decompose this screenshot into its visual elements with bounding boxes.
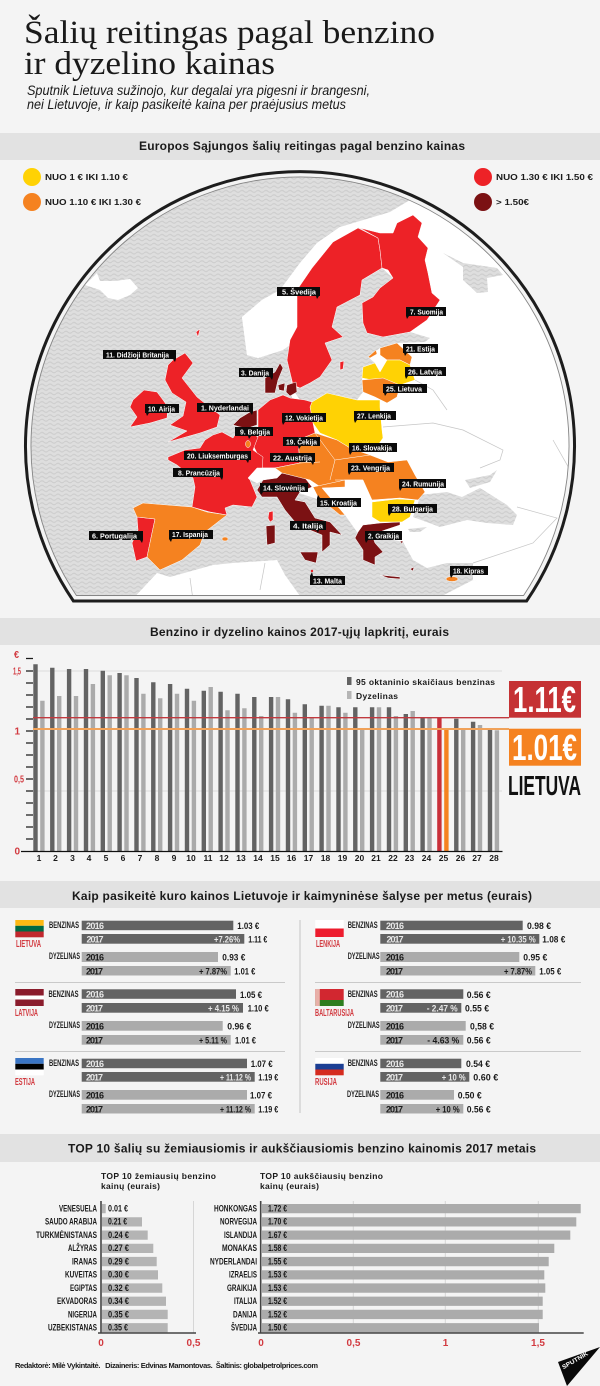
panel: Estonia: + 11.12 %	[220, 1104, 251, 1114]
heading: top 10 section	[0, 1134, 600, 1162]
country labels: 27. Lenkija	[357, 412, 392, 420]
x axis labels: 25	[439, 853, 448, 863]
panel: Latvia: 2017	[86, 1004, 103, 1014]
Italy and Slovenia	[257, 473, 342, 552]
chart: lowest prices: UZBEKISTANAS	[48, 1322, 97, 1332]
country labels: 25. Lietuva	[386, 384, 423, 394]
chart: lowest prices: KUVEITAS	[65, 1270, 97, 1280]
title	[24, 13, 435, 82]
country labels: 8. Prancūzija	[178, 468, 221, 478]
chart: highest prices: MONAKAS	[222, 1243, 257, 1253]
panel: Russia: 0.56 €	[467, 1104, 491, 1116]
panel: Belarus: - 4.63 %	[427, 1036, 459, 1046]
panel: Estonia: BENZINAS	[49, 1058, 79, 1068]
panel: Latvia: 1.10 €	[248, 1004, 269, 1014]
country labels: 4. Italija	[293, 522, 324, 530]
map ring	[31, 177, 569, 595]
chart: lowest prices: 0.35 €	[108, 1310, 129, 1320]
Germany	[253, 395, 315, 468]
country labels: 20. Liuksemburgas	[187, 452, 248, 460]
chart: lowest prices: EKVADORAS	[57, 1296, 97, 1306]
panel: Lithuania: LIETUVA	[16, 939, 41, 950]
x axis labels: 20	[355, 853, 364, 863]
panel: Russia: + 10 %	[436, 1104, 460, 1114]
country labels: 2. Graikija	[368, 532, 400, 540]
x axis labels: 24	[422, 853, 431, 863]
chart: lowest prices: 0.34 €	[108, 1296, 129, 1306]
chart: lowest prices: TOP 10 žemiausių benzino	[101, 1171, 216, 1181]
legend: price ranges: NUO 1.30 € IKI 1.50 €	[496, 172, 593, 182]
Latvia	[362, 360, 415, 385]
Netherlands	[233, 410, 257, 428]
chart: highest prices: 1	[443, 1338, 449, 1349]
panel: Belarus: 0.55 €	[465, 1004, 490, 1014]
Poland	[310, 393, 383, 448]
country labels: 11. Didžioji Britanija	[106, 350, 170, 360]
country labels: 1. Nyderlandai	[201, 404, 249, 412]
panel: Poland: + 7.87%	[504, 966, 532, 976]
heading: yearly change section: Kaip pasikeitė kuro kainos Lietuvoje ir kaimyninėse šalyse per metus (eurais)	[72, 889, 532, 903]
x axis labels: 26	[456, 853, 465, 863]
legend: price ranges: NUO 1.10 € IKI 1.30 €	[45, 197, 141, 207]
x axis labels: 8	[155, 853, 160, 863]
Switzerland	[248, 468, 277, 483]
x axis labels: 10	[186, 853, 196, 863]
x axis labels: 13	[236, 853, 246, 863]
panel: Lithuania: +7.26%	[214, 934, 240, 944]
bar chart: petrol and diesel prices	[13, 650, 509, 863]
chart: lowest prices	[36, 1171, 216, 1349]
x axis labels: 16	[287, 853, 296, 863]
x axis labels: 23	[405, 853, 414, 863]
chart: lowest prices: 0.29 €	[108, 1256, 129, 1266]
chart: highest prices: 1.58 €	[268, 1243, 287, 1253]
x axis labels: 28	[489, 853, 499, 863]
country labels: 24. Rumunija	[402, 480, 445, 488]
panel: Lithuania: DYZELINAS	[49, 951, 80, 961]
chart: lowest prices: SAUDO ARABIJA	[45, 1216, 97, 1226]
panel: Lithuania: + 7.87%	[199, 966, 227, 976]
panel: Poland: 0.98 €	[527, 921, 552, 932]
panel: Russia: 0.54 €	[466, 1059, 491, 1070]
Lithuania	[362, 378, 400, 403]
heading: bar chart section: Benzino ir dyzelino kainos 2017-ųjų lapkritį, eurais	[150, 625, 449, 639]
Spain	[133, 503, 227, 570]
x axis labels: 9	[172, 853, 177, 863]
chart: highest prices: 0,5	[347, 1338, 361, 1349]
panel: Russia: DYZELINAS	[347, 1089, 379, 1099]
chart: lowest prices: 0	[98, 1338, 104, 1349]
chart: highest prices: NORVEGIJA	[220, 1216, 257, 1226]
chart: highest prices: DANIJA	[233, 1310, 257, 1320]
panel: Belarus: 2016	[386, 1022, 404, 1032]
flag: Belarus	[315, 989, 344, 1006]
y axis labels	[13, 650, 24, 858]
United Kingdom	[165, 353, 220, 442]
chart: highest prices: 1.52 €	[268, 1310, 287, 1320]
reference lines	[33, 717, 509, 719]
map of Europe	[24, 170, 576, 602]
callout: Lithuania prices	[508, 679, 581, 801]
panel: Estonia: + 11.12 %	[220, 1072, 251, 1082]
legend: fuel types	[347, 677, 495, 701]
chart: highest prices: 1.53 €	[268, 1270, 287, 1280]
panel: Estonia: 1.07 €	[251, 1059, 273, 1070]
Ireland	[130, 390, 168, 427]
panel: Poland: 2016	[386, 952, 404, 962]
x axis labels: 3	[70, 853, 75, 863]
panel: Russia: 2017	[386, 1104, 403, 1114]
country labels: 14. Slovėnija	[263, 484, 306, 492]
panel: Estonia: 1.19 €	[258, 1072, 279, 1084]
panel: Estonia: ESTIJA	[15, 1077, 35, 1088]
panel: Poland: 1.08 €	[542, 934, 566, 946]
chart: highest prices: 0	[258, 1338, 264, 1349]
chart: highest prices: ITALIJA	[234, 1296, 257, 1306]
Greece	[355, 522, 400, 565]
legend: price ranges: > 1.50€	[496, 197, 529, 207]
panel: Estonia: 2016	[86, 1090, 104, 1100]
Malta	[311, 570, 313, 572]
chart: highest prices: 1.50 €	[268, 1322, 287, 1332]
country labels: 17. Ispanija	[172, 530, 209, 539]
Portugal	[132, 517, 155, 561]
panel: Belarus: 0.56 €	[467, 1036, 491, 1046]
heading: map section	[0, 133, 600, 160]
legend: price ranges	[23, 168, 593, 211]
chart: highest prices: kainų (eurais)	[260, 1181, 319, 1191]
chart: highest prices: TOP 10 aukščiausių benzino	[260, 1171, 383, 1181]
Norway	[242, 227, 340, 358]
panel: Lithuania	[15, 920, 268, 978]
country labels: 3. Danija	[241, 368, 270, 378]
chart: lowest prices: 0.35 €	[108, 1322, 128, 1332]
panel: Belarus: BALTARUSIJA	[315, 1008, 354, 1019]
panel: Russia	[315, 1058, 499, 1116]
chart: highest prices: 1.53 €	[268, 1283, 287, 1293]
country labels: 6. Portugalija	[92, 532, 138, 540]
x axis labels: 17	[304, 853, 313, 863]
panel: Russia: 0.50 €	[458, 1090, 482, 1102]
non-EU land	[242, 200, 568, 595]
country labels: 21. Estija	[406, 344, 436, 354]
panel: Latvia	[15, 989, 269, 1046]
panel: Russia: RUSIJA	[315, 1077, 337, 1088]
panel: Lithuania: 2016	[86, 952, 104, 962]
panel: Poland	[315, 920, 566, 978]
panel: Russia: 2016	[386, 1059, 404, 1069]
x axis labels: 5	[104, 853, 109, 863]
heading: yearly change section	[0, 881, 600, 908]
panel: Russia: 2016	[386, 1090, 404, 1100]
panel: Latvia: 0.96 €	[227, 1022, 252, 1032]
country labels: 12. Vokietija	[285, 414, 324, 422]
x axis labels: 6	[121, 853, 126, 863]
legend: fuel types: 95 oktaninio skaičiaus benzinas	[356, 677, 495, 687]
x axis labels: 11	[204, 853, 213, 863]
panel: Poland: 2016	[386, 921, 404, 931]
chart: lowest prices: TURKMĖNISTANAS	[36, 1230, 97, 1240]
country labels: 26. Latvija	[408, 368, 443, 376]
chart: highest prices: NYDERLANDAI	[210, 1256, 257, 1266]
y axis labels: 0	[14, 846, 20, 858]
chart: lowest prices: EGIPTAS	[70, 1283, 97, 1293]
legend: price ranges: NUO 1 € IKI 1.10 €	[45, 172, 128, 182]
x axis labels: 4	[87, 853, 92, 863]
inland seas	[293, 268, 430, 402]
callout: Lithuania prices: 1.01€	[512, 727, 577, 768]
x axis labels: 27	[472, 853, 482, 863]
x axis labels: 2	[53, 853, 58, 863]
chart: highest prices: IZRAELIS	[229, 1270, 257, 1280]
heading: top 10 section: TOP 10 šalių su žemiausiomis ir aukščiausiomis benzino kainomis 2017 metais	[68, 1142, 536, 1156]
credits: Redaktorė: Milė Vykintaitė. Dizaineris: Edvinas Mamontovas. Šaltinis: globalpetrolprices.com	[15, 1361, 318, 1370]
chart: lowest prices: IRANAS	[72, 1256, 97, 1266]
panel: Estonia: DYZELINAS	[49, 1089, 80, 1099]
title: ir dyzelino kainas	[24, 46, 275, 82]
legend: fuel types: Dyzelinas	[356, 691, 398, 701]
panel: Poland: + 10.35 %	[501, 934, 536, 944]
panel: Estonia: 1.07 €	[250, 1090, 273, 1102]
x axis labels: 12	[219, 853, 229, 863]
logo: Sputnik: SPUTNIK	[561, 1351, 590, 1371]
title: Šalių reitingas pagal benzino	[24, 13, 435, 51]
chart: highest prices: ISLANDIJA	[224, 1230, 257, 1240]
panel: Latvia: 1.01 €	[235, 1036, 257, 1046]
country labels: 9. Belgija	[240, 428, 271, 436]
panel: Belarus: BENZINAS	[348, 989, 378, 999]
chart: highest prices: GRAIKIJA	[227, 1283, 257, 1293]
chart: lowest prices: kainų (eurais)	[101, 1181, 160, 1191]
x axis labels: 19	[338, 853, 347, 863]
Cyprus	[446, 576, 458, 582]
chart: highest prices: 1.72 €	[268, 1204, 287, 1214]
subtitle: nei Lietuvoje, ir kaip pasikeitė kaina per praėjusius metus	[27, 96, 346, 112]
x axis labels: 21	[371, 853, 381, 863]
flag: Lithuania	[15, 920, 44, 937]
chart: highest prices: HONKONGAS	[214, 1204, 257, 1214]
chart: lowest prices: 0.01 €	[108, 1204, 128, 1214]
x axis labels: 18	[321, 853, 330, 863]
chart: lowest prices: 0.30 €	[108, 1270, 129, 1280]
chart: lowest prices: 0,5	[187, 1338, 201, 1349]
panel: Estonia: 2016	[86, 1059, 104, 1069]
panel: Lithuania: 0.93 €	[222, 952, 246, 964]
chart: lowest prices: 0.24 €	[108, 1230, 129, 1240]
country labels: 22. Austrija	[273, 454, 313, 462]
country labels: 13. Malta	[313, 576, 343, 586]
panel: Poland: 0.95 €	[523, 952, 548, 964]
panel: Lithuania: 1.11 €	[248, 934, 268, 946]
panel: Russia: 0.60 €	[473, 1072, 499, 1084]
panel: Latvia: 2017	[86, 1036, 103, 1046]
country labels: 15. Kroatija	[320, 498, 358, 508]
chart: lowest prices: 0.21 €	[108, 1216, 127, 1226]
y axis labels: 1	[14, 726, 20, 738]
chart: highest prices: ŠVEDIJA	[231, 1322, 257, 1332]
country labels	[89, 287, 488, 586]
panel: Belarus: DYZELINAS	[348, 1020, 380, 1030]
panel: Estonia: 2017	[86, 1072, 103, 1082]
chart: lowest prices: NIGERIJA	[68, 1310, 97, 1320]
panel: Lithuania: 2017	[86, 966, 103, 976]
panel: Poland: DYZELINAS	[348, 951, 380, 961]
panel: Latvia: BENZINAS	[48, 989, 78, 999]
panel: Poland: 1.05 €	[539, 966, 562, 978]
panel: Latvia: DYZELINAS	[49, 1020, 80, 1030]
x axis labels	[37, 853, 499, 863]
panel: Russia: BENZINAS	[348, 1058, 378, 1068]
country labels: 10. Airija	[148, 404, 176, 414]
France and Belgium	[168, 427, 263, 515]
chart: highest prices: 1.55 €	[268, 1256, 287, 1266]
Central Europe: Czechia, Slovakia, Austria, Hungary, Romania	[275, 433, 425, 500]
panel: Latvia: + 4.15 %	[208, 1004, 239, 1014]
panel: Lithuania: BENZINAS	[49, 920, 79, 930]
Bulgaria	[372, 499, 415, 522]
panel: Lithuania: 2017	[86, 934, 104, 944]
non-EU borders	[190, 228, 570, 600]
country labels: 18. Kipras	[453, 566, 484, 576]
panel: Estonia: 1.19 €	[258, 1104, 279, 1116]
panel: Russia: + 10 %	[442, 1072, 466, 1082]
Denmark	[265, 363, 283, 393]
panel: Belarus: 2017	[386, 1036, 403, 1046]
flag: Latvia	[15, 989, 44, 1006]
x axis labels: 15	[270, 853, 280, 863]
subtitle: Sputnik Lietuva sužinojo, kur degalai yra pigesni ir brangesni,	[27, 82, 370, 98]
Estonia	[380, 343, 412, 365]
panel: Belarus: 2016	[386, 990, 404, 1000]
dividers	[15, 982, 581, 1052]
panel: Lithuania: 1.01 €	[234, 966, 256, 978]
chart: highest prices: 1,5	[531, 1338, 545, 1349]
flag: Russia	[315, 1058, 344, 1075]
panel: Lithuania: 1.03 €	[237, 921, 260, 932]
panel: Latvia: + 5.11 %	[199, 1036, 227, 1046]
country labels: 23. Vengrija	[351, 464, 391, 472]
country labels: 16. Slovakija	[352, 444, 393, 452]
logo: Sputnik	[558, 1347, 600, 1386]
EU countries	[130, 215, 458, 582]
chart: highest prices: 1.70 €	[268, 1216, 287, 1226]
Lithuania highlight bars	[437, 718, 442, 851]
panel: Latvia: 2016	[86, 990, 104, 1000]
Finland	[360, 215, 440, 337]
country labels: 19. Čekija	[286, 438, 318, 446]
subtitle	[27, 82, 370, 112]
flag: Poland	[315, 920, 344, 937]
flag: Estonia	[15, 1058, 44, 1075]
chart: lowest prices: 0.32 €	[108, 1283, 129, 1293]
chart: highest prices: 1.67 €	[268, 1230, 287, 1240]
panel: Poland: 2017	[386, 934, 404, 944]
panel: Latvia: 1.05 €	[240, 990, 263, 1001]
panel: Latvia: LATVIJA	[15, 1008, 38, 1019]
country labels: 7. Suomija	[410, 308, 444, 316]
Sweden	[287, 228, 382, 388]
internal borders	[300, 433, 370, 480]
panel: Estonia: 2017	[86, 1104, 103, 1114]
heading: map section: Europos Sąjungos šalių reitingas pagal benzino kainas	[139, 139, 465, 153]
callout: Lithuania prices: 1.11€	[513, 679, 576, 720]
country labels: 5. Švedija	[282, 288, 317, 296]
panel: Belarus: 2017	[386, 1004, 403, 1014]
panel: Lithuania: 2016	[86, 921, 104, 931]
panel: Poland: LENKIJA	[316, 939, 340, 950]
panel: Latvia: 2016	[86, 1022, 104, 1032]
heading: bar chart section	[0, 618, 600, 645]
y axis labels: 1,5	[13, 666, 21, 678]
panel: Poland: BENZINAS	[348, 920, 378, 930]
panel: Russia: 2017	[386, 1072, 403, 1082]
y axis labels: 0,5	[14, 774, 24, 786]
x axis labels: 22	[388, 853, 398, 863]
panel: Belarus: 0,58 €	[470, 1022, 495, 1032]
chart: highest prices: 1.52 €	[268, 1296, 287, 1306]
panel: Poland: 2017	[386, 966, 403, 976]
panel: Belarus: 0.56 €	[467, 990, 491, 1001]
panel: Belarus	[315, 989, 495, 1046]
chart: lowest prices: VENESUELA	[59, 1204, 97, 1214]
Croatia	[313, 480, 345, 515]
panel: Belarus: - 2.47 %	[427, 1004, 458, 1014]
x axis labels: 7	[138, 853, 143, 863]
x axis labels: 1	[37, 853, 42, 863]
chart: lowest prices: 0.27 €	[108, 1243, 129, 1253]
chart: lowest prices: ALŽYRAS	[68, 1242, 97, 1253]
country labels: 28. Bulgarija	[392, 504, 434, 514]
x axis labels: 14	[253, 853, 263, 863]
panel: Estonia	[15, 1058, 279, 1116]
y axis labels: €	[14, 650, 19, 661]
chart: highest prices	[210, 1171, 584, 1349]
